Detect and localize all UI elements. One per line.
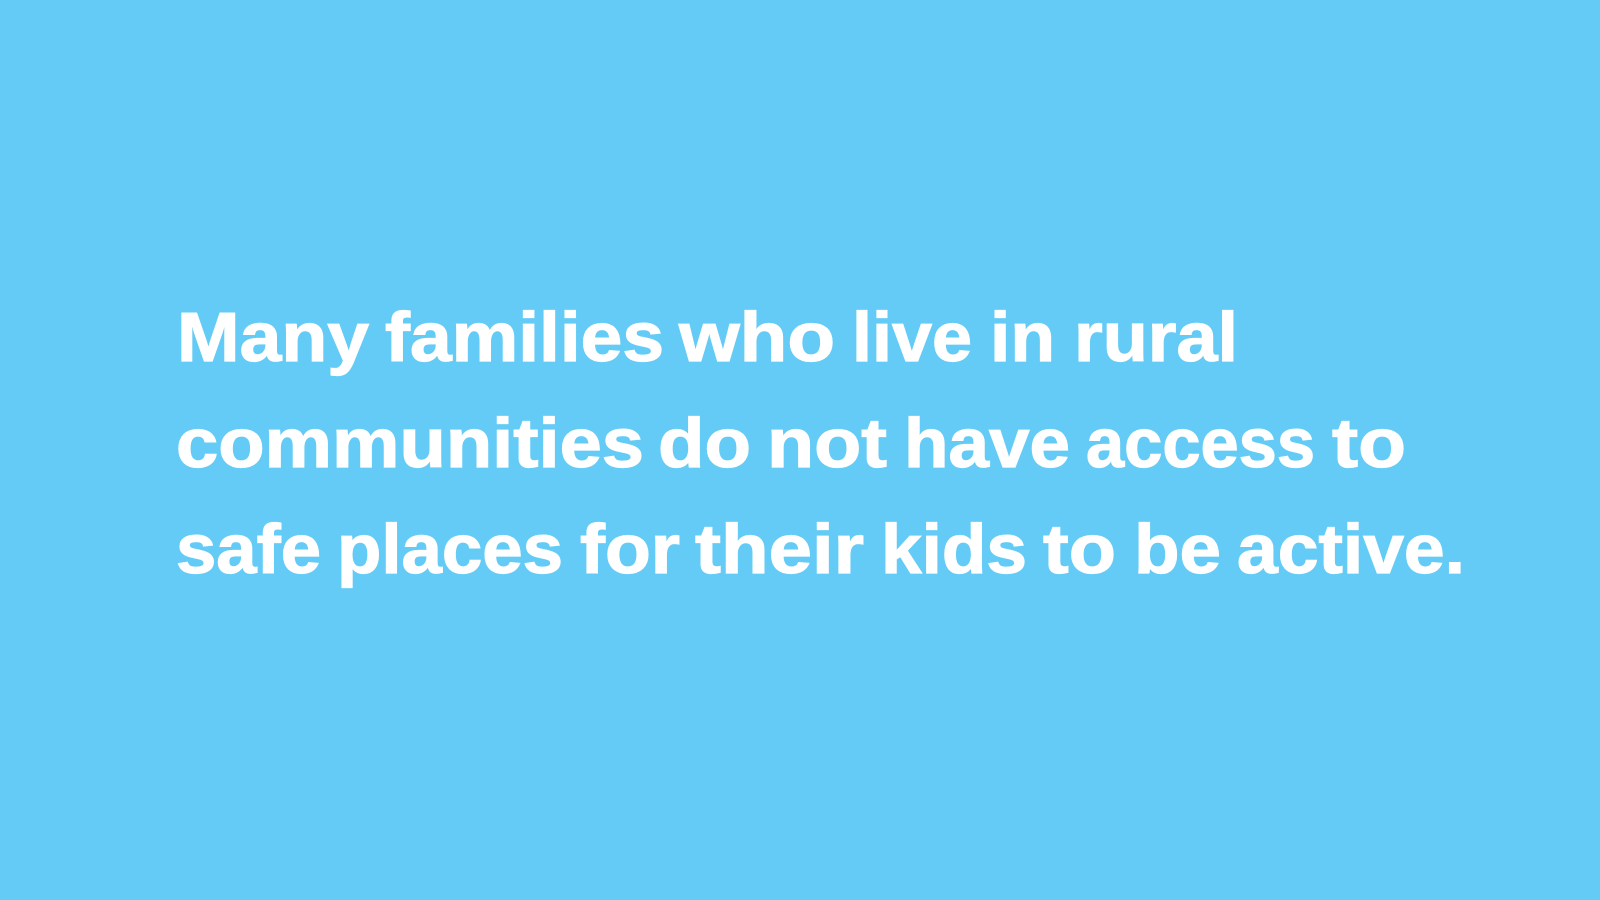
headline statement: safe [176, 510, 321, 588]
headline statement: have [904, 404, 1070, 482]
headline statement: for [580, 510, 680, 588]
headline statement: places [337, 510, 563, 588]
headline statement: Many [177, 298, 369, 376]
headline statement: rural [1074, 298, 1238, 376]
headline statement: to [1332, 404, 1406, 482]
headline statement: not [767, 404, 887, 482]
headline statement: communities [176, 404, 644, 482]
headline statement: in [990, 298, 1055, 376]
headline statement: who [678, 298, 835, 376]
headline statement: families [385, 298, 664, 376]
headline statement: active. [1237, 510, 1465, 588]
headline statement: be [1134, 510, 1221, 588]
headline statement [176, 298, 1465, 588]
headline statement: kids [881, 510, 1027, 588]
headline statement: do [658, 404, 751, 482]
headline statement: access [1086, 404, 1315, 482]
headline statement: their [695, 510, 864, 588]
headline statement: to [1043, 510, 1116, 588]
headline statement: live [852, 298, 972, 376]
